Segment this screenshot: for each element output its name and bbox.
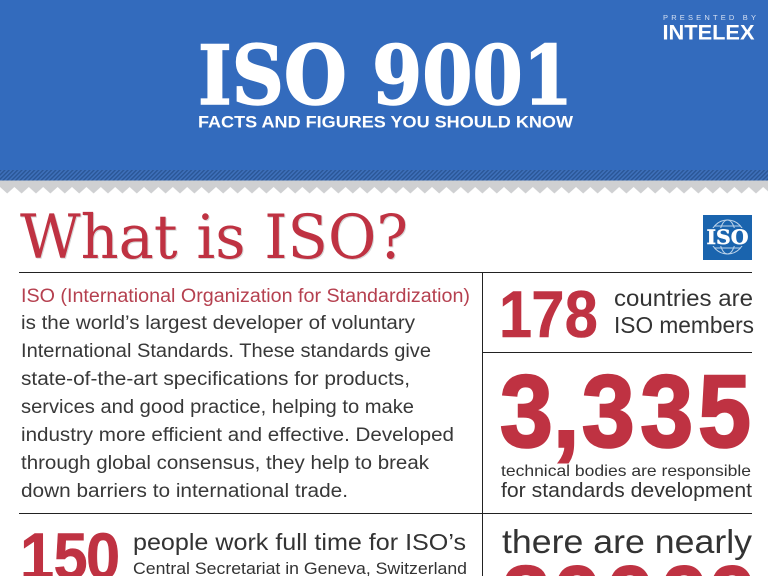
stat: 178 countries: 178 [499,278,598,352]
text block: what is ISO description: down barriers to international trade. [21,481,348,502]
text block: what is ISO description: International Standards. These standards give [21,341,431,362]
title: ISO 9001 [198,29,573,124]
stat: 178 countries [499,278,754,352]
grid lines [19,272,752,576]
stat: 150 people: people work full time for ISO’s [133,529,466,555]
subtitle: FACTS AND FIGURES YOU SHOULD KNOW [198,114,573,132]
text block: what is ISO description: ISO (International Organization for Standardization) [21,286,470,307]
text block: what is ISO description: is the world’s largest developer of voluntary [21,313,416,334]
text block: what is ISO description [21,286,470,502]
stat: 150 people [20,519,467,576]
stat: 3,335 technical bodies: for standards development [501,480,752,502]
text block: what is ISO description: state-of-the-art specifications for products, [21,369,410,390]
stat: 178 countries: countries are [614,285,753,311]
text block: what is ISO description: services and good practice, helping to make [21,397,414,418]
presented by logo [662,13,756,44]
stat: 3,335 technical bodies: technical bodies are responsible [501,463,751,480]
heading: what is ISO: What is ISO? [20,202,408,273]
stat: 178 countries: ISO members [614,312,754,338]
stat: 3,335 technical bodies: 3,335 [500,354,751,468]
presented by logo: PRESENTED BY [663,13,756,22]
stat: there are nearly 20,000 [501,523,757,576]
text block: what is ISO description: industry more efficient and effective. Developed [21,425,454,446]
presented by logo: INTELEX [662,22,754,44]
header banner [0,0,768,194]
text block: what is ISO description: through global consensus, they help to break [21,453,430,474]
icon: ISO logo [703,215,752,260]
stat: there are nearly 20,000: there are nearly [502,523,753,560]
icon: ISO logo: ISO [706,225,748,249]
